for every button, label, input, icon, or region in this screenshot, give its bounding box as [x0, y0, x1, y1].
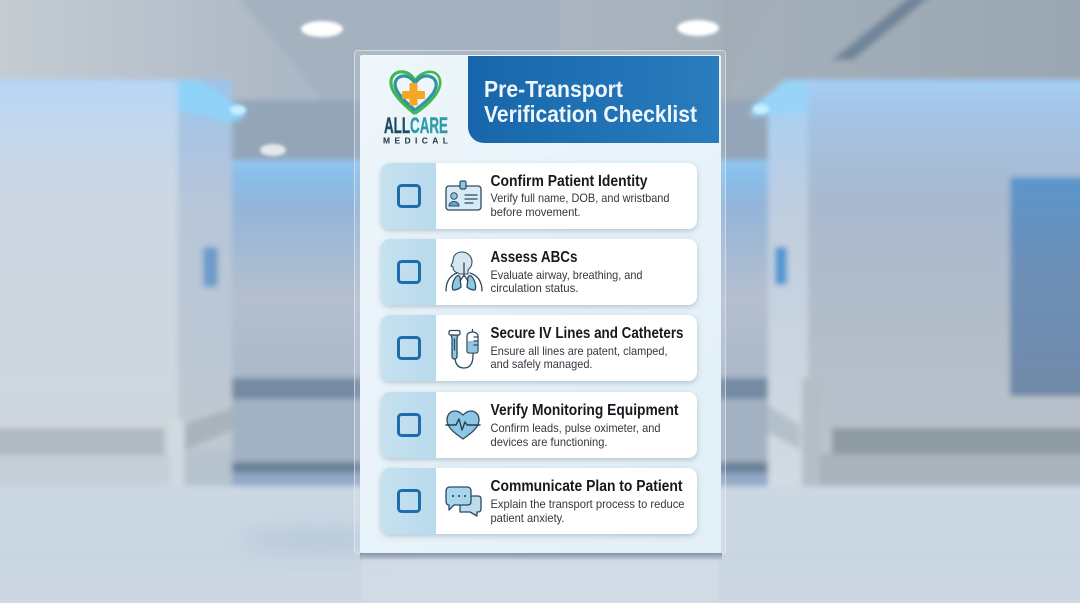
checkbox [398, 338, 420, 358]
card 5 title: Communicate Plan to Patient [490, 478, 682, 495]
icon: ID badge [446, 181, 481, 210]
header banner [468, 56, 719, 143]
icon: heart monitor [446, 411, 480, 439]
card 2 description: Evaluate airway, breathing, and [490, 268, 642, 282]
card 5 description: patient anxiety. [490, 511, 564, 525]
card 2 title: Assess ABCs [490, 249, 578, 266]
card 4 title: Verify Monitoring Equipment [490, 402, 678, 419]
table shading near panel [240, 527, 400, 553]
table [0, 486, 1080, 603]
left wall [0, 80, 178, 495]
card 5: Communicate Plan to Patient [381, 468, 697, 534]
checkbox [398, 490, 420, 512]
panel: checklist card [354, 50, 726, 561]
card 2 description: circulation status. [490, 281, 578, 295]
logo wordmark: ALLCARE [384, 113, 448, 138]
card 1 description: Verify full name, DOB, and wristband [490, 191, 670, 205]
card 1 title: Confirm Patient Identity [490, 173, 648, 190]
card 2: Assess ABCs [381, 239, 697, 305]
checkbox [398, 262, 420, 282]
card 4: Verify Monitoring Equipment [381, 392, 697, 458]
card 5 description: Explain the transport process to reduce [490, 497, 685, 511]
card 3 description: and safely managed. [490, 357, 592, 371]
header banner: Verification Checklist [484, 101, 697, 127]
icon: speech bubbles [446, 487, 481, 516]
far corridor [225, 100, 775, 162]
logo: AllCare Medical [383, 72, 448, 146]
right wall [808, 80, 1080, 495]
heading: Pre-Transport [484, 76, 623, 102]
card 4 description: devices are functioning. [490, 435, 608, 449]
card 4 description: Confirm leads, pulse oximeter, and [490, 421, 660, 435]
card 3 title: Secure IV Lines and Catheters [490, 325, 684, 342]
ceiling [0, 0, 280, 110]
icon: heart with cross [391, 72, 440, 113]
logo subtitle: MEDICAL [383, 136, 448, 146]
checkbox [398, 186, 420, 206]
card 3 description: Ensure all lines are patent, clamped, [490, 344, 668, 358]
icon: IV bag and tube [449, 330, 478, 368]
card 3: Secure IV Lines and Catheters [381, 315, 697, 381]
panel reflection on table [362, 558, 718, 603]
card 1: Confirm Patient Identity [381, 163, 697, 229]
icon: lungs and airway [446, 252, 482, 291]
checkbox [398, 414, 420, 436]
ceiling vent [832, 0, 932, 60]
card 1 description: before movement. [490, 205, 580, 219]
